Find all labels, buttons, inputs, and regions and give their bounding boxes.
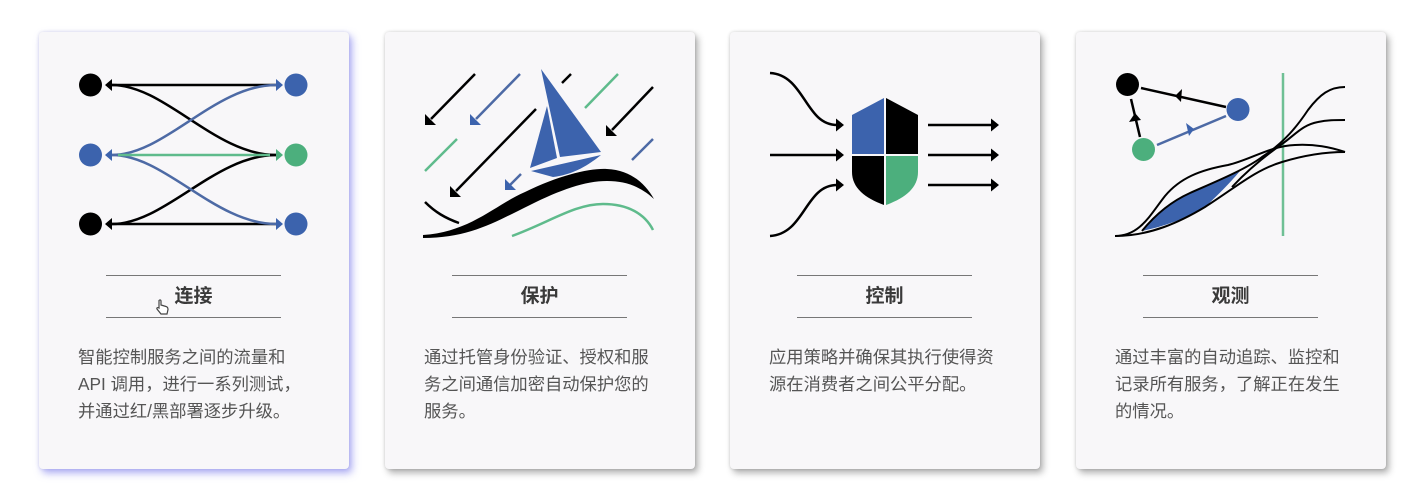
panel: protect xyxy=(385,32,695,469)
text: connect description: 智能控制服务之间的流量和 xyxy=(78,347,285,367)
text: control description xyxy=(769,347,994,394)
panel: connect xyxy=(39,32,349,469)
icon: hand cursor xyxy=(156,299,169,315)
panel: control xyxy=(730,32,1040,469)
heading: protect: 保护 xyxy=(520,286,558,307)
text: control description: 源在消费者之间公平分配。 xyxy=(769,374,976,394)
icon: trace graph and metric curves xyxy=(1115,73,1346,237)
icon: sailboat with arrows xyxy=(423,69,654,238)
heading: observe: 观测 xyxy=(1211,286,1250,307)
text: observe description xyxy=(1115,347,1340,421)
text: connect description: API 调用，进行一系列测试， xyxy=(78,374,301,394)
icon: shield with policy arrows xyxy=(770,72,999,238)
heading: connect: 连接 xyxy=(174,286,212,307)
heading: protect xyxy=(452,275,627,318)
heading: control: 控制 xyxy=(865,286,904,307)
text: observe description: 记录所有服务，了解正在发生 xyxy=(1115,374,1340,394)
text: protect description: 务之间通信加密自动保护您的 xyxy=(424,374,649,394)
text: connect description xyxy=(78,347,301,421)
text: protect description xyxy=(424,347,649,421)
text: connect description: 并通过红/黑部署逐步升级。 xyxy=(78,401,290,421)
heading: observe xyxy=(1143,275,1318,318)
text: observe description: 通过丰富的自动追踪、监控和 xyxy=(1115,347,1340,367)
heading: control xyxy=(797,275,972,318)
panel: observe xyxy=(1076,32,1386,469)
text: protect description: 通过托管身份验证、授权和服 xyxy=(424,347,649,367)
text: control description: 应用策略并确保其执行使得资 xyxy=(769,347,994,367)
text: observe description: 的情况。 xyxy=(1115,401,1184,421)
heading: connect xyxy=(106,275,281,318)
icon: traffic routing between services xyxy=(79,74,308,236)
text: protect description: 服务。 xyxy=(424,401,476,421)
